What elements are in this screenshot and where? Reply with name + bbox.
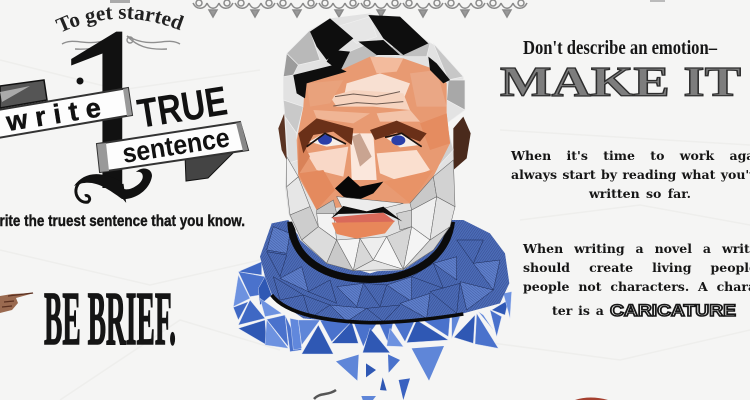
black collar lines (291, 222, 451, 279)
moustache (331, 206, 402, 221)
knitted body (260, 220, 509, 324)
icon: pointing hand (0, 293, 34, 313)
portrait: head (278, 13, 471, 272)
numeral one (71, 32, 152, 204)
forehead wrinkles (333, 92, 403, 106)
top ornamental border (110, 0, 665, 17)
skin facets (298, 57, 450, 210)
ears (278, 112, 471, 170)
eyebrows (298, 118, 427, 153)
text block: work again: written so far. (588, 186, 691, 201)
nose (335, 176, 383, 201)
chin skin (332, 221, 395, 239)
bottom ornaments (314, 390, 608, 400)
ribbon: write (0, 80, 132, 138)
beard facets (287, 157, 455, 271)
face skin (297, 57, 450, 210)
ribbon: sentence: sentence (120, 122, 232, 169)
portrait: scarf (233, 220, 512, 400)
text block: living people (522, 241, 750, 318)
ribbon: sentence (97, 122, 248, 181)
heading: describe an emotion: Don't describe an emotion– (523, 37, 718, 59)
heading: to get started: To get started (55, 7, 184, 32)
scarf lower shards (233, 262, 512, 354)
hair and beard base (283, 13, 465, 272)
text block: living people: should create living people (523, 260, 750, 275)
falling triangles (336, 346, 444, 400)
heading: make it: MAKE IT (500, 60, 741, 106)
eyes (307, 133, 422, 147)
ribbon: write: write (3, 91, 110, 137)
black hair (293, 15, 450, 98)
text block: living people: ter is a (552, 303, 604, 318)
ornament under heading (62, 36, 180, 49)
grey hair facets (283, 17, 465, 170)
word: TRUE: TRUE (134, 77, 230, 137)
heading: to get started (55, 7, 184, 32)
lips (332, 213, 395, 223)
text: BE BRIEF. (44, 277, 176, 361)
text block: work again (510, 148, 750, 201)
word: caricature: CARICATURE (610, 301, 736, 320)
